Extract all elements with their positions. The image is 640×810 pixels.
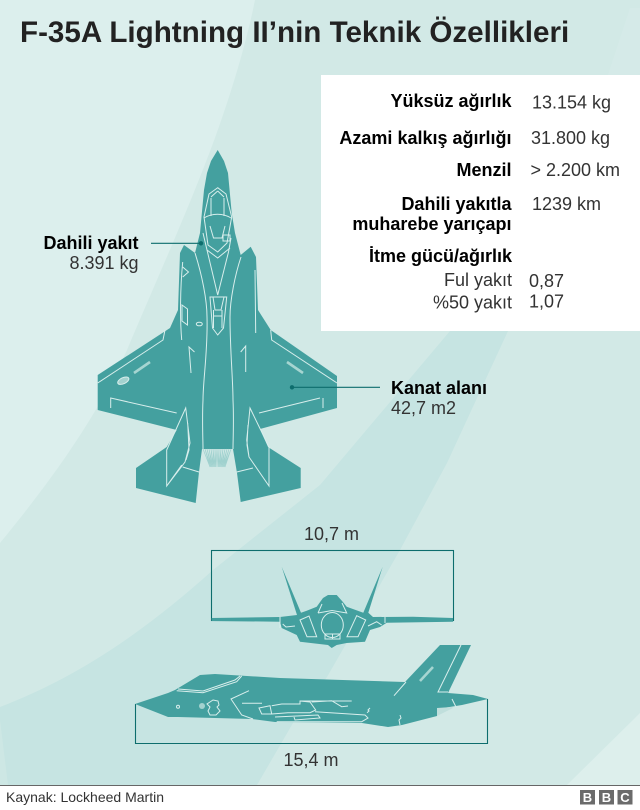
dimension: length — [136, 699, 488, 770]
spec: range — [456, 160, 620, 180]
spec: range: > 2.200 km — [530, 160, 620, 180]
spec: thrust to weight: 1,07 — [529, 292, 564, 312]
spec: thrust to weight — [369, 246, 564, 312]
callout: internal fuel: 8.391 kg — [69, 253, 138, 273]
spec: combat radius — [352, 194, 601, 234]
spec: empty weight: 13.154 kg — [532, 92, 611, 112]
BBC logo: C — [620, 790, 630, 805]
dimension: length: 15,4 m — [283, 750, 339, 770]
callout: wing area: 42,7 m2 — [391, 398, 456, 418]
spec: max takeoff weight: Azami kalkış ağırlığı — [339, 128, 512, 148]
title: F-35A Lightning II’nin Teknik Özellikleri — [20, 16, 569, 49]
callout: internal fuel — [43, 233, 203, 273]
side view aircraft — [135, 645, 488, 727]
callout: internal fuel: Dahili yakıt — [43, 233, 138, 253]
top view aircraft — [98, 150, 337, 503]
BBC logo: B — [602, 790, 611, 805]
spec: combat radius: muharebe yarıçapı — [352, 214, 512, 234]
spec: thrust to weight: Ful yakıt — [444, 270, 512, 290]
spec: combat radius: 1239 km — [532, 194, 601, 214]
callout: wing area: Kanat alanı — [391, 378, 487, 398]
spec: range: Menzil — [456, 160, 512, 180]
front view aircraft — [212, 567, 453, 648]
BBC logo: B — [583, 790, 592, 805]
spec: max takeoff weight — [339, 128, 610, 148]
source footer — [0, 785, 640, 810]
spec: combat radius: Dahili yakıtla — [401, 194, 512, 214]
BBC logo — [580, 790, 632, 805]
source footer: Kaynak: Lockheed Martin — [6, 789, 164, 805]
spec: max takeoff weight: 31.800 kg — [531, 128, 610, 148]
spec: empty weight — [390, 91, 611, 112]
dimension: wingspan: 10,7 m — [304, 524, 359, 544]
spec: thrust to weight: İtme gücü/ağırlık — [369, 246, 513, 266]
spec: thrust to weight: 0,87 — [529, 271, 564, 291]
spec: thrust to weight: %50 yakıt — [433, 292, 512, 312]
spec: empty weight: Yüksüz ağırlık — [390, 91, 512, 111]
callout: wing area — [290, 378, 487, 418]
dimension: wingspan — [212, 524, 454, 620]
panel: specifications — [321, 75, 640, 331]
